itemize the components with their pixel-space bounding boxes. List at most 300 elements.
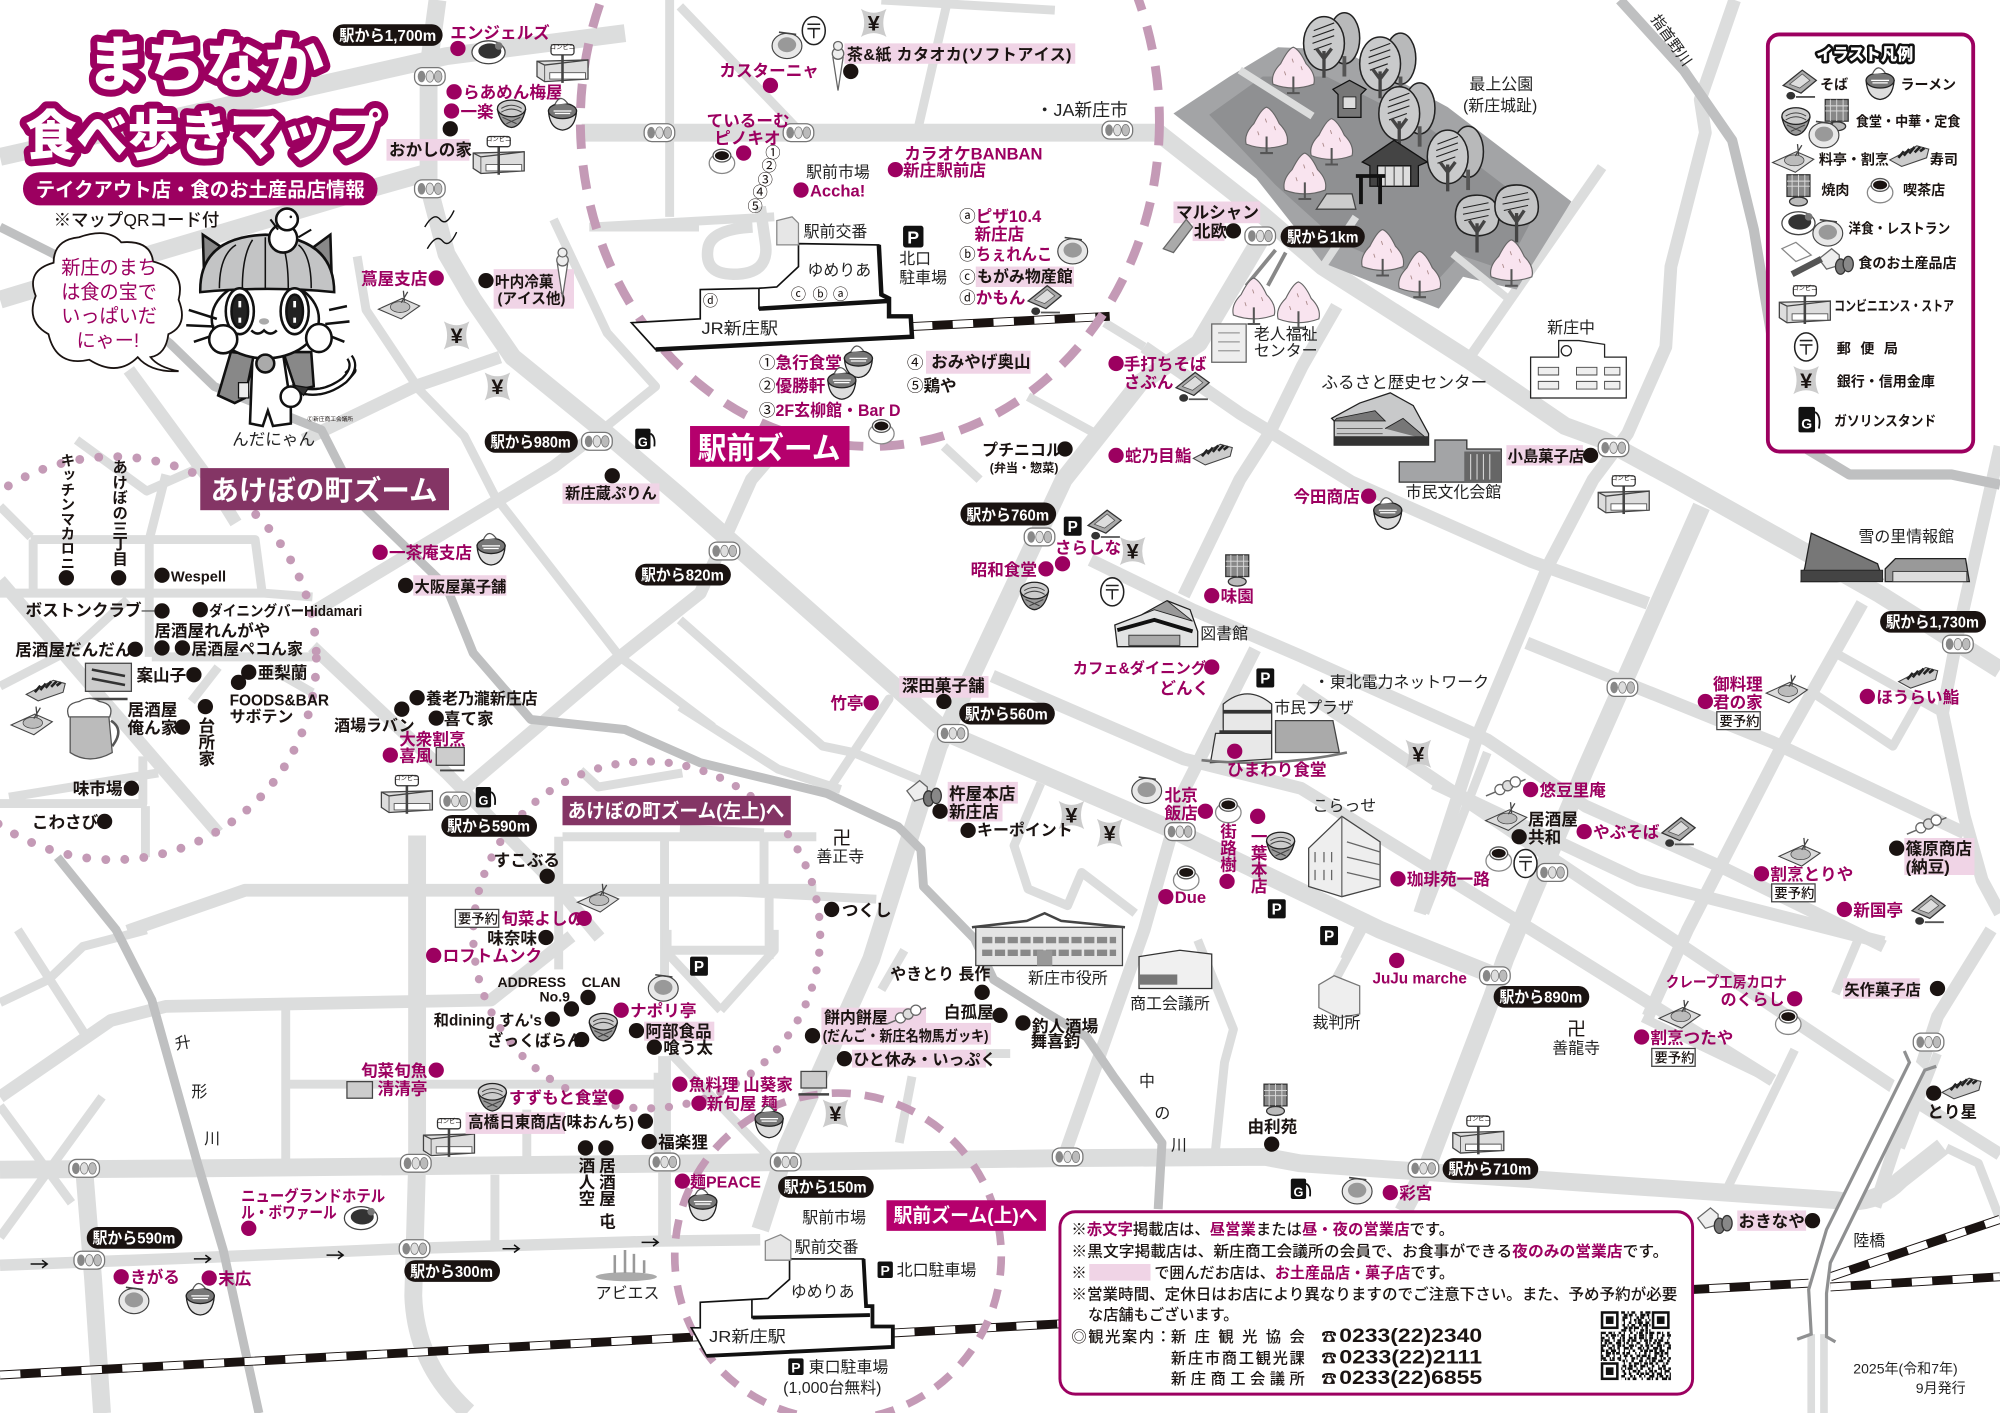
- store: キッチンマカロニ: キッチンマカロニ: [58, 453, 74, 570]
- 善龍寺: 卍: [1567, 1020, 1586, 1041]
- store: 杵屋本店新庄店: 新庄店: [949, 803, 999, 822]
- plate: 駅前ズーム: 駅前ズーム: [698, 431, 841, 466]
- 駅前市場 upper: 駅前市場: [806, 163, 870, 181]
- store: 末広: 末広: [218, 1269, 252, 1288]
- store: ADDRESS: No.9: [540, 988, 570, 1004]
- store: 急行食堂: 急行食堂: [776, 353, 842, 373]
- store: 彩宮: [1342, 1178, 1432, 1204]
- note 5: な店舗もございます。: [1088, 1306, 1239, 1324]
- store: ピザ10.4: ピザ10.4: [976, 207, 1042, 226]
- store: さらしな: [1055, 510, 1121, 571]
- station map upper: ③: [758, 172, 773, 189]
- 東北電力ネットワーク: ・東北電力ネットワーク: [1314, 673, 1489, 691]
- 善正寺: 卍: [832, 828, 851, 849]
- tourism contacts: 0233(22)6855: [1339, 1368, 1483, 1389]
- store: 北京飯店: 北京: [1165, 786, 1198, 805]
- store: 玄柳館 Bar D: 2F玄柳館・Bar D: [776, 400, 901, 420]
- store: 居酒屋れんがや: [154, 620, 270, 656]
- store: おみやげ奥山: おみやげ奥山: [931, 352, 1031, 371]
- store: 旬菜旬魚清清亭: 旬菜旬魚: [361, 1061, 428, 1081]
- store: 小島菓子店: [1506, 445, 1598, 466]
- store: カフェ&ダイニングどんく: カフェ&ダイニング: [1073, 659, 1206, 677]
- store: もがみ物産館: もがみ物産館: [977, 267, 1073, 286]
- store: 餅内餅屋: [805, 1005, 991, 1045]
- ふるさと歴史センター: [1321, 373, 1487, 445]
- tourism contacts: ☎: [1321, 1329, 1337, 1346]
- icons: akebono food group: [11, 663, 131, 759]
- JA新庄市: ・JA新庄市: [1036, 100, 1128, 120]
- store: きがる: [114, 1267, 180, 1314]
- store: ているーむピノキオ: ピノキオ: [714, 129, 781, 148]
- store: ちぇれんこ: ちぇれんこ: [976, 245, 1052, 264]
- 老人福祉センター: [1212, 324, 1318, 362]
- store: 味奈味: 味奈味: [487, 929, 537, 948]
- legend: 銀行・信用金庫: ¥: [1800, 368, 1812, 393]
- store: 麺PEACE: [675, 1172, 761, 1221]
- store: 旬菜旬魚清清亭: 清清亭: [378, 1079, 427, 1098]
- river names: 升: [174, 1033, 192, 1054]
- store: ナポリ亭: [614, 975, 696, 1021]
- store: 深田菓子舗: [899, 675, 989, 709]
- legend panel: [1768, 34, 1973, 452]
- arrows: [31, 1239, 658, 1268]
- plate: あけぼの町ズーム: あけぼの町ズーム: [210, 474, 438, 506]
- 善龍寺: 善龍寺: [1552, 1040, 1600, 1058]
- store: 居酒屋屯: 屯: [596, 1213, 615, 1230]
- legend: そば・ラーメン: そば: [1820, 76, 1848, 92]
- 北口駐車場 lower: P: [881, 1263, 890, 1279]
- QR code: [1599, 1310, 1672, 1383]
- store: やきとり長作: [890, 966, 990, 1000]
- river names: 形: [191, 1083, 207, 1101]
- store: 鶏や: ⑤: [907, 377, 923, 396]
- store: らあめん梅屋: らあめん梅屋: [463, 83, 562, 102]
- store: プチニコル: [982, 441, 1073, 475]
- 老人福祉センター: 老人福祉: [1254, 325, 1318, 343]
- ふるさと歴史センター: ふるさと歴史センター: [1321, 373, 1487, 392]
- parking marks: P: [1260, 671, 1270, 688]
- legend: ガソリンスタンド: ガソリンスタンド: [1834, 413, 1936, 429]
- store: 居酒屋俺ん家: [128, 701, 190, 737]
- 東口駐車場: [783, 1358, 888, 1397]
- store: 深田菓子舗: 深田菓子舗: [902, 675, 985, 695]
- subtitle plate: テイクアウト店・食のお土産品店情報: [36, 179, 365, 201]
- 新庄中: 新庄中: [1547, 319, 1595, 337]
- store: おきなや: [1698, 1208, 1820, 1233]
- store: JuJu marche: JuJu marche: [1372, 970, 1467, 987]
- distance pills: 駅から300m: [410, 1263, 493, 1281]
- store: 御料理君の家: [1698, 675, 1807, 730]
- note 1: ※赤文字掲載店は、昼営業または昼・夜の営業店です。: [1071, 1221, 1454, 1239]
- store: 悠豆里庵: 悠豆里庵: [1540, 781, 1606, 800]
- store: クレープ工房カロナ のくらし: クレープ工房カロナ: [1666, 974, 1787, 991]
- convenience stores: コンビニ: [486, 134, 511, 143]
- distance pills: 駅から1,730m: [1886, 614, 1979, 632]
- distance pills: 駅から820m: [641, 566, 724, 584]
- store: 北京飯店: 飯店: [1165, 804, 1198, 823]
- store: 叶内冷菓: 叶内冷菓: [495, 274, 554, 291]
- store: カフェ&ダイニングどんく: どんく: [1159, 679, 1209, 698]
- store: 急行食堂: ①: [759, 354, 776, 373]
- park: 最上公園: 最上公園: [1469, 75, 1533, 93]
- station map upper: JR新庄駅: [702, 319, 779, 338]
- convenience stores: コンビニ: [436, 1116, 462, 1125]
- dotted ring: akebono left: [0, 457, 316, 860]
- store: ダイニングバーHidamari: ダイニングバーHidamari: [209, 602, 362, 620]
- 北口駐車場 upper: [899, 226, 947, 287]
- store: 居酒屋屯: [596, 1140, 616, 1230]
- store: 急行食堂: [759, 346, 872, 378]
- store: マルシャン北欧: マルシャン: [1176, 203, 1259, 222]
- speech bubble: にゃー!: [77, 331, 139, 352]
- store: 篠原商店: 篠原商店: [1906, 839, 1972, 859]
- store: かもん: かもん: [976, 289, 1026, 308]
- store: 茶&紙 カタオカ: [832, 41, 1075, 91]
- store: 新庄蔵ぷりん: 新庄蔵ぷりん: [565, 486, 657, 503]
- store: 割烹つたや: 要予約: [1654, 1050, 1694, 1065]
- store: 旬菜旬魚清清亭: [347, 1061, 444, 1098]
- store: 一茶庵支店: 一茶庵支店: [389, 543, 472, 563]
- store: 矢作菓子店: [1843, 978, 1945, 999]
- 北口駐車場 upper: 北口: [899, 250, 931, 268]
- store: 旬菜よしの: [455, 884, 619, 929]
- distance pills: 駅から560m: [965, 705, 1048, 723]
- store: 居酒屋れんがや: 居酒屋れんがや: [154, 620, 270, 640]
- store: マルシャン北欧: [1163, 202, 1260, 253]
- post office marks: [802, 17, 1537, 878]
- legend: 洋食・レストラン: 洋食・レストラン: [1848, 220, 1950, 236]
- tourism contacts: 新庄観光協会: [1171, 1329, 1305, 1346]
- 善正寺: [816, 828, 864, 866]
- store: 居酒屋共和: [1486, 802, 1578, 871]
- station map upper: ⑤: [747, 199, 763, 216]
- store: やぶそば: [1577, 818, 1695, 847]
- 駅前交番 upper: [777, 217, 867, 245]
- store: 由利苑: [1247, 1084, 1298, 1152]
- legend: そば・ラーメン: ラーメン: [1901, 76, 1956, 92]
- river names: 川: [204, 1131, 220, 1148]
- store: 杵屋本店新庄店: 杵屋本店: [949, 785, 1015, 804]
- store: 福楽狸: 福楽狸: [658, 1133, 708, 1152]
- store: クレープ工房カロナ のくらし: [1666, 974, 1802, 1034]
- 駅前交番 upper: 駅前交番: [804, 223, 867, 241]
- parking marks: P: [1324, 928, 1334, 945]
- 市民プラザ: 市民プラザ: [1274, 699, 1354, 717]
- 裁判所: 裁判所: [1312, 1014, 1360, 1032]
- store: マルシャン北欧: 北欧: [1194, 222, 1227, 241]
- store: ているーむピノキオ: [707, 111, 790, 173]
- store: ADDRESS: ADDRESS: [497, 974, 566, 990]
- store: 珈琲苑一路: 珈琲苑一路: [1407, 870, 1490, 889]
- store: 叶内冷菓: [478, 248, 574, 309]
- store: 居酒屋俺ん家: 居酒屋: [128, 701, 177, 720]
- railway: [0, 316, 2000, 1375]
- speech bubble: いっぱいだ: [61, 306, 157, 328]
- store: 一楽: 一楽: [460, 102, 494, 121]
- issue date: [1853, 1361, 1966, 1396]
- store: らあめん梅屋: [446, 83, 577, 130]
- station map upper: ⓑ: [812, 287, 828, 304]
- store: 小島菓子店: 小島菓子店: [1508, 448, 1584, 466]
- river names: の: [1154, 1106, 1170, 1123]
- store: 優勝軒: [759, 368, 856, 399]
- store: 末広: [186, 1269, 252, 1315]
- 図書館: [1115, 601, 1248, 647]
- 北口駐車場 upper: 駐車場: [899, 269, 947, 287]
- store: 案山子: 案山子: [136, 666, 186, 685]
- store: ているーむピノキオ: ているーむ: [707, 111, 790, 130]
- store: エンジェルズ: エンジェルズ: [450, 22, 550, 42]
- store: 昭和食堂: [971, 560, 1054, 610]
- tourism contacts: 新庄市商工観光課: [1171, 1350, 1305, 1368]
- store: 蛇乃目鮨: [1108, 444, 1232, 466]
- store: 彩宮: 彩宮: [1399, 1184, 1432, 1203]
- 市民文化会館: [1399, 440, 1501, 501]
- distance pills: 駅から710m: [1448, 1161, 1531, 1179]
- mascot: んだにゃん: [186, 209, 353, 449]
- 裁判所: [1312, 976, 1360, 1032]
- store: 大衆割烹喜風: 喜風: [399, 745, 433, 765]
- store: FOODS&BARサボテン: FOODS&BAR: [230, 692, 329, 709]
- store: ADDRESS: [497, 974, 579, 1017]
- store: 酒場ラバン: 酒場ラバン: [334, 717, 415, 735]
- 新庄市役所: [972, 913, 1125, 987]
- store: 餅内餅屋: 餅内餅屋: [824, 1009, 888, 1027]
- note 4: ※営業時間、定休日はお店により異なりますのでご注意下さい。また、予め予約が必要: [1071, 1286, 1677, 1304]
- store: 味市場: 味市場: [73, 779, 123, 799]
- store: ひまわり食堂: ひまわり食堂: [1227, 761, 1327, 780]
- bank marks: ¥: [829, 1101, 841, 1126]
- store: 高橋日東商店: 高橋日東商店(味おんち): [468, 1113, 634, 1132]
- store: 手打ちそばさぶん: [1108, 354, 1209, 402]
- tourism contacts: 新庄商工会議所: [1171, 1371, 1305, 1388]
- store: 新国亭: 新国亭: [1853, 901, 1903, 920]
- convenience stores: コンビニ: [550, 42, 575, 51]
- store: おきなや: おきなや: [1739, 1212, 1805, 1231]
- parking marks: P: [1068, 519, 1078, 536]
- store: 割烹つたや: [1634, 1000, 1733, 1066]
- store: カフェ&ダイニングどんく: [1073, 659, 1219, 698]
- speech bubble: は食の宝で: [61, 281, 157, 303]
- store: 鶏や: 鶏や: [923, 377, 957, 396]
- store: 一楽: [444, 100, 526, 128]
- distance pills: 駅から1,700m: [339, 27, 436, 45]
- station map upper: ⓒ: [791, 287, 806, 304]
- store: ボストンクラブ: ボストンクラブ: [26, 600, 142, 620]
- store: ほうらい鮨: [1860, 668, 1960, 707]
- store: 優勝軒: ②: [759, 377, 776, 396]
- 新庄中: [1531, 319, 1626, 398]
- store: ひと休み・いっぷく: ひと休み・いっぷく: [853, 1051, 996, 1069]
- station map upper: [631, 145, 912, 349]
- store: 味園: 味園: [1221, 587, 1254, 606]
- store: 居酒屋ペコん家: 居酒屋ペコん家: [191, 640, 303, 658]
- store: 養老乃瀧新庄店: 養老乃瀧新庄店: [426, 689, 538, 708]
- legend: 料亭・割烹・寿司: 寿司: [1930, 152, 1958, 168]
- 東口駐車場: (1,000台無料): [783, 1379, 881, 1397]
- convenience stores: コンビニ: [1611, 473, 1636, 482]
- subtitle plate: [23, 172, 378, 205]
- river names: 川: [1171, 1138, 1187, 1155]
- store: 由利苑: 由利苑: [1247, 1118, 1298, 1137]
- store: 玄柳館 Bar D: ③: [759, 401, 776, 420]
- 東口駐車場: 東口駐車場: [809, 1358, 888, 1376]
- river squiggle marks: [425, 210, 457, 249]
- 雪の里情報館: 雪の里情報館: [1858, 528, 1954, 546]
- store: おみやげ奥山: [907, 351, 1031, 374]
- tourism contacts: 0233(22)2111: [1339, 1348, 1483, 1369]
- store: 玄柳館 Bar D: [759, 400, 901, 444]
- zoom ring: station upper: [580, 0, 1159, 446]
- store: FOODS&BARサボテン: [230, 675, 329, 726]
- legend: コンビニエンス・ストア: コンビニエンス・ストア: [1834, 298, 1954, 314]
- store: Wespell: Wespell: [171, 570, 226, 586]
- store: おかしの家: おかしの家: [389, 140, 472, 160]
- store: ニューグランドホテル ル・ボワァール: ニューグランドホテル: [241, 1187, 385, 1206]
- store: ざっくばらん: ざっくばらん: [487, 1031, 583, 1050]
- legend: 料亭・割烹・寿司: 料亭・割烹: [1819, 152, 1889, 168]
- legend: 焼肉・喫茶店: [1787, 175, 1945, 206]
- store: 酒人空: 酒人空: [576, 1156, 595, 1207]
- store: 居酒屋俺ん家: 俺ん家: [128, 717, 178, 737]
- gas station marks: G: [1294, 1184, 1304, 1199]
- distance pills: 駅から980m: [490, 434, 571, 452]
- store: Wespell: [154, 568, 226, 586]
- store: もがみ物産館: ⓒ: [959, 268, 976, 287]
- plate: あけぼの町ズーム(左上)へ: あけぼの町ズーム(左上)へ: [568, 800, 784, 823]
- store: 和dining すん's: 和dining すん's: [434, 1013, 542, 1030]
- legend: コンビニエンス・ストア: コンビニ: [1792, 283, 1818, 292]
- store: Accha!: Accha!: [810, 181, 865, 200]
- store: 割烹つたや: 割烹つたや: [1651, 1028, 1733, 1047]
- convenience stores: コンビニ: [1466, 1114, 1491, 1123]
- store: ほうらい鮨: ほうらい鮨: [1876, 688, 1960, 707]
- parking marks: P: [1272, 902, 1282, 919]
- store: JuJu marche: [1372, 953, 1467, 987]
- bank marks: [444, 9, 1431, 1128]
- distance pills: 駅から760m: [966, 506, 1049, 524]
- store: カラオケBANBAN: 新庄駅前店: [903, 161, 986, 180]
- issue date: 9月発行: [1916, 1380, 1966, 1396]
- legend: 銀行・信用金庫: 銀行・信用金庫: [1837, 373, 1935, 389]
- station map lower: [691, 1259, 893, 1356]
- store: かもん: ⓓ: [959, 289, 976, 308]
- store: きがる: きがる: [130, 1267, 180, 1287]
- notes panel: [1060, 1212, 1693, 1394]
- store: 蔦屋支店: 蔦屋支店: [361, 268, 427, 288]
- station map upper: ゆめりあ: [807, 262, 871, 280]
- legend: 食堂・中華・定食: [1782, 99, 1960, 148]
- store: ニューグランドホテル ル・ボワァール: [241, 1187, 385, 1236]
- store: 竹亭: [830, 694, 879, 713]
- parking marks: [690, 517, 1338, 976]
- convenience stores: コンビニ: [394, 773, 420, 782]
- gas station marks: G: [478, 793, 488, 808]
- store: 新国亭: [1837, 895, 1945, 925]
- plate: 駅前ズーム(上)へ: 駅前ズーム(上)へ: [893, 1204, 1038, 1227]
- legend: 焼肉・喫茶店: 喫茶店: [1903, 182, 1945, 198]
- legend: そば・ラーメン: [1783, 68, 1956, 99]
- store: カスターニャ: カスターニャ: [719, 62, 819, 81]
- 善正寺: 善正寺: [816, 848, 864, 866]
- 滑り台: [1246, 250, 1286, 286]
- 市民文化会館: 市民文化会館: [1406, 483, 1501, 501]
- mascot: んだにゃん: んだにゃん: [232, 430, 315, 449]
- store: 今田商店: 今田商店: [1293, 487, 1360, 507]
- store: Due: Due: [1175, 888, 1206, 907]
- speech bubble: [33, 233, 182, 371]
- bank marks: ¥: [868, 11, 880, 36]
- 北口駐車場 upper: P: [907, 228, 919, 248]
- store: 大衆割烹喜風: 大衆割烹: [399, 730, 466, 749]
- overpass bridge: 陸橋: [1853, 1232, 1885, 1250]
- store: さらしな: さらしな: [1055, 539, 1121, 558]
- store: カスターニャ: [719, 32, 819, 93]
- store: かもん: [959, 286, 1061, 315]
- store: 蔦屋支店: [361, 268, 444, 319]
- 商工会議所: [1130, 950, 1212, 1013]
- title: 食べ歩きマップ: [26, 107, 383, 166]
- gas station marks: [476, 429, 1310, 1199]
- store: すこぶる: [494, 851, 560, 884]
- store: プチニコル: (弁当・惣菜): [990, 460, 1058, 475]
- store: 麺PEACE: 麺PEACE: [690, 1172, 761, 1191]
- store: 釣人酒場舞喜鈞: [1015, 1015, 1099, 1051]
- アビエス: アビエス: [596, 1284, 659, 1302]
- tourism contacts: [1071, 1326, 1483, 1389]
- station map upper: ⓐ: [833, 287, 848, 304]
- store: 新旬屋麺: [691, 1094, 783, 1138]
- zoom ring: station lower: [675, 1093, 1001, 1413]
- store: CLAN: [580, 974, 621, 1005]
- store: 北京飯店: [1132, 777, 1213, 823]
- store: 酒場ラバン: [334, 702, 415, 735]
- store: 居酒屋共和: 共和: [1528, 828, 1561, 847]
- store: 旬菜よしの: 旬菜よしの: [501, 910, 584, 929]
- legend: 郵便局: 郵便局: [1837, 340, 1898, 356]
- store: ピザ10.4: [959, 207, 1042, 244]
- store: おみやげ奥山: ④: [907, 354, 923, 373]
- legend: 郵便局: [1795, 333, 1898, 361]
- store: 旬菜よしの: 要予約: [458, 911, 498, 926]
- tourism contacts: ☎: [1321, 1351, 1337, 1368]
- store: 居酒屋だんだん: 居酒屋だんだん: [15, 641, 131, 660]
- store: 一葉本店: 一葉本店: [1248, 828, 1267, 894]
- 市民プラザ: [1202, 694, 1354, 763]
- plate: あけぼの町ズーム: [200, 468, 449, 510]
- store: ニューグランドホテル ル・ボワァール: ル・ボワァール: [241, 1204, 337, 1222]
- store: 昭和食堂: 昭和食堂: [971, 560, 1037, 579]
- store: 街路樹: [1216, 798, 1241, 889]
- station map lower: ゆめりあ: [791, 1283, 855, 1301]
- speech bubble: 新庄のまち: [61, 257, 157, 279]
- dotted ring: akebono centre: [473, 761, 820, 1108]
- 公園の桜: [1233, 278, 1319, 328]
- store: 餅内餅屋: (だんご・新庄名物馬ガッキ): [823, 1027, 989, 1045]
- legend: 洋食・レストラン: [1782, 212, 1950, 246]
- 老人福祉センター: センター: [1254, 342, 1318, 360]
- bank marks: ¥: [1104, 821, 1116, 846]
- title: まちなか: [87, 31, 324, 98]
- 北口駐車場 lower: 北口駐車場: [897, 1262, 976, 1280]
- 東口駐車場: P: [791, 1359, 801, 1375]
- store: エンジェルズ: [450, 22, 550, 64]
- distance pills: 駅から890m: [1499, 989, 1582, 1007]
- legend: 料亭・割烹・寿司: [1773, 144, 1958, 172]
- store: こわさび: こわさび: [32, 813, 99, 832]
- 駅前交番 lower: [765, 1235, 858, 1260]
- store: あけぼの三丁目: あけぼの三丁目: [110, 459, 128, 566]
